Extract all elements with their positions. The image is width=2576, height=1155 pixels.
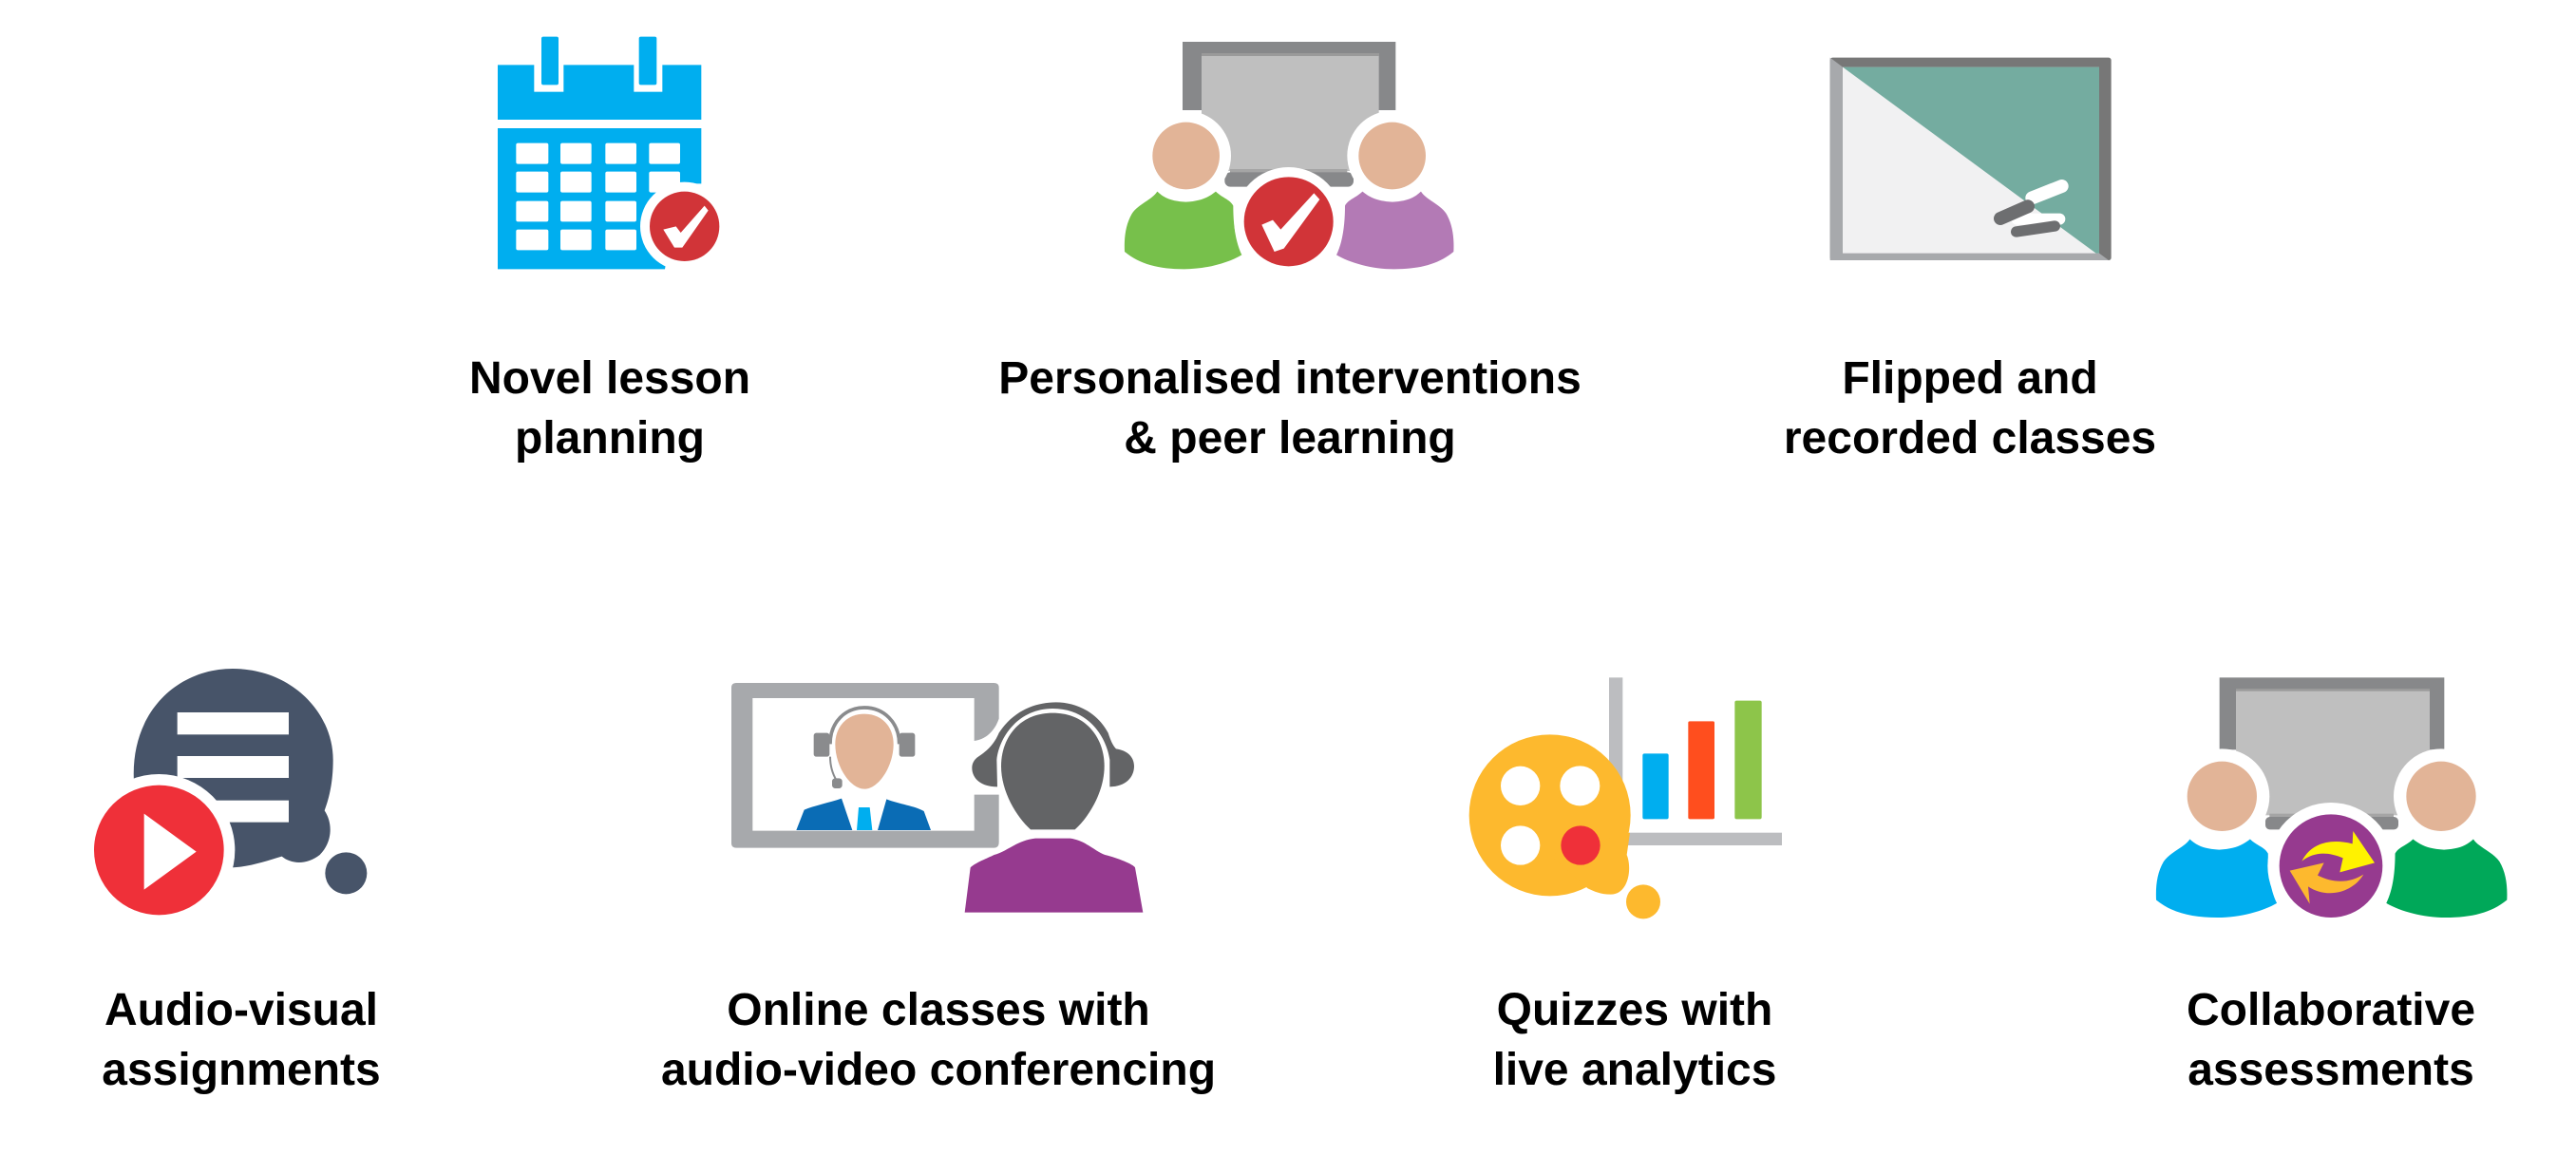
heading: Novel lesson planning: planning	[515, 413, 705, 464]
heading: Quizzes with live analytics: Quizzes with	[1497, 985, 1772, 1035]
heading: Audio-visual assignments: assignments	[102, 1045, 381, 1095]
icon: quiz bubble with bar chart	[1469, 677, 1782, 918]
heading: Novel lesson planning: Novel lesson	[469, 353, 750, 404]
heading: Audio-visual assignments: Audio-visual	[104, 985, 378, 1035]
icon: calendar with check	[498, 37, 729, 271]
icon: flipped classroom board	[1830, 58, 2112, 260]
heading: Collaborative assessments: assessments	[2188, 1045, 2474, 1095]
heading: Online classes with audio-video conferencing: audio-video conferencing	[661, 1045, 1216, 1095]
heading: Online classes with audio-video conferencing: Online classes with	[727, 985, 1150, 1035]
heading: Flipped and recorded classes: Flipped and	[1842, 353, 2098, 404]
heading: Quizzes with live analytics: live analytics	[1493, 1045, 1776, 1095]
icon: two learners with check in front of a screen	[1125, 42, 1453, 276]
icon: video conferencing screen with listener	[731, 683, 1143, 913]
heading: Personalised interventions and peer learning: & peer learning	[1124, 413, 1456, 464]
heading: Personalised interventions and peer learning: Personalised interventions	[998, 353, 1582, 404]
icon: collaborative assessment with two learners	[2156, 677, 2507, 929]
icon: speech bubble with play button	[83, 669, 367, 926]
heading: Flipped and recorded classes: recorded classes	[1784, 413, 2156, 464]
heading: Collaborative assessments: Collaborative	[2187, 985, 2475, 1035]
